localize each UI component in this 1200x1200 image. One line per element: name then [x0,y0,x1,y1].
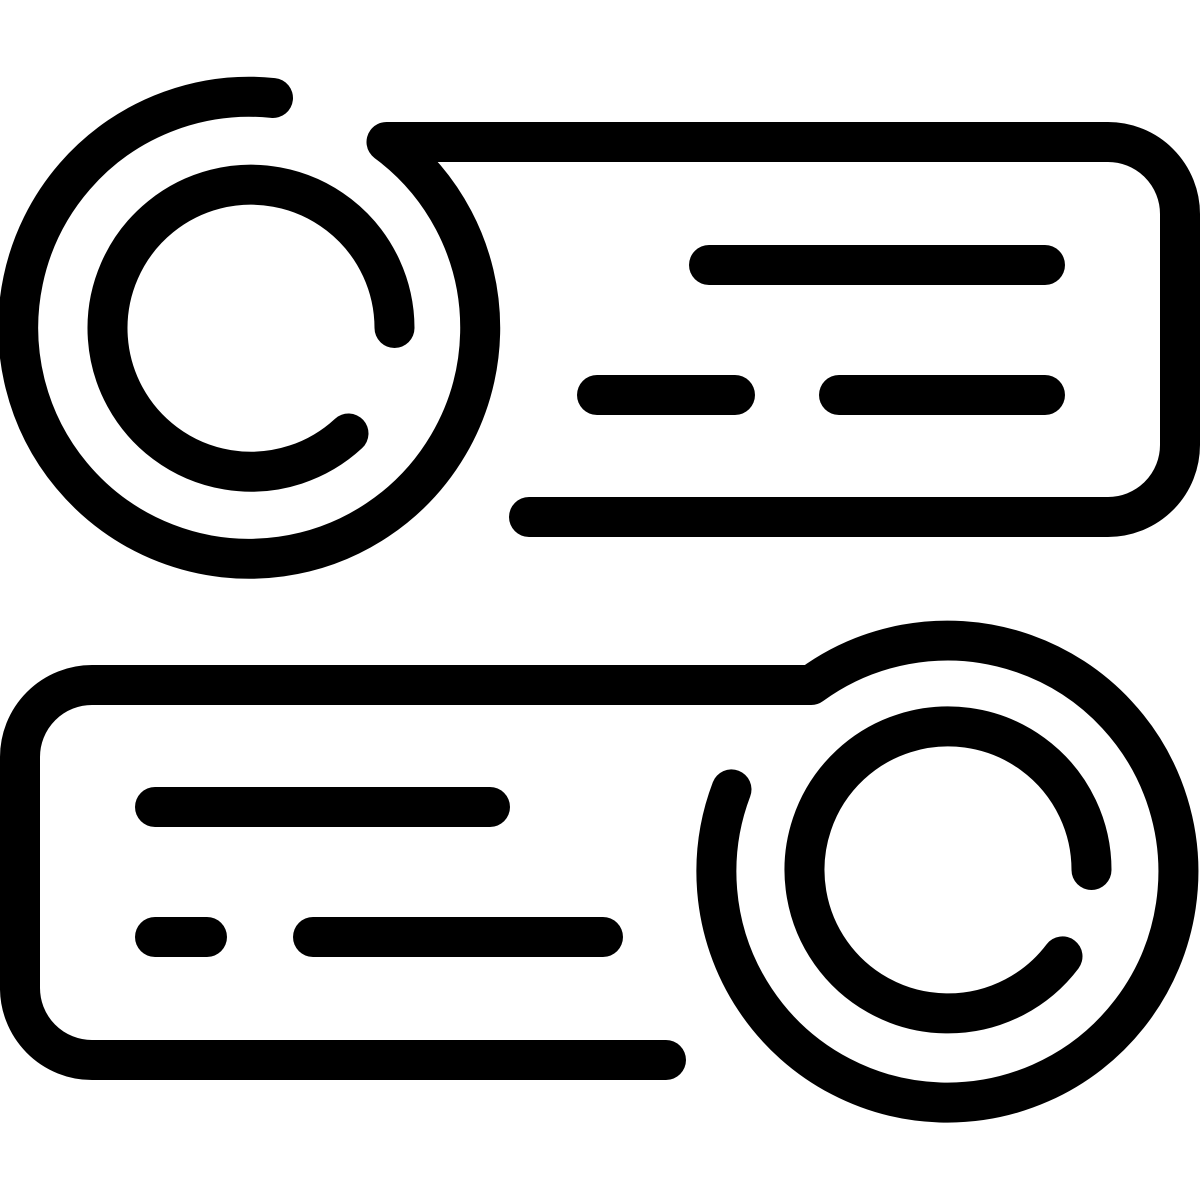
bottom inner circle arc [804,726,1092,1013]
bottom text lines [155,807,603,937]
bottom outer circle arc and box [20,641,1178,1103]
top text lines [597,265,1045,395]
top outer circle arc and box [18,97,1180,559]
bottom panel [20,641,1178,1103]
top inner circle arc [108,185,394,472]
top panel [18,97,1180,559]
